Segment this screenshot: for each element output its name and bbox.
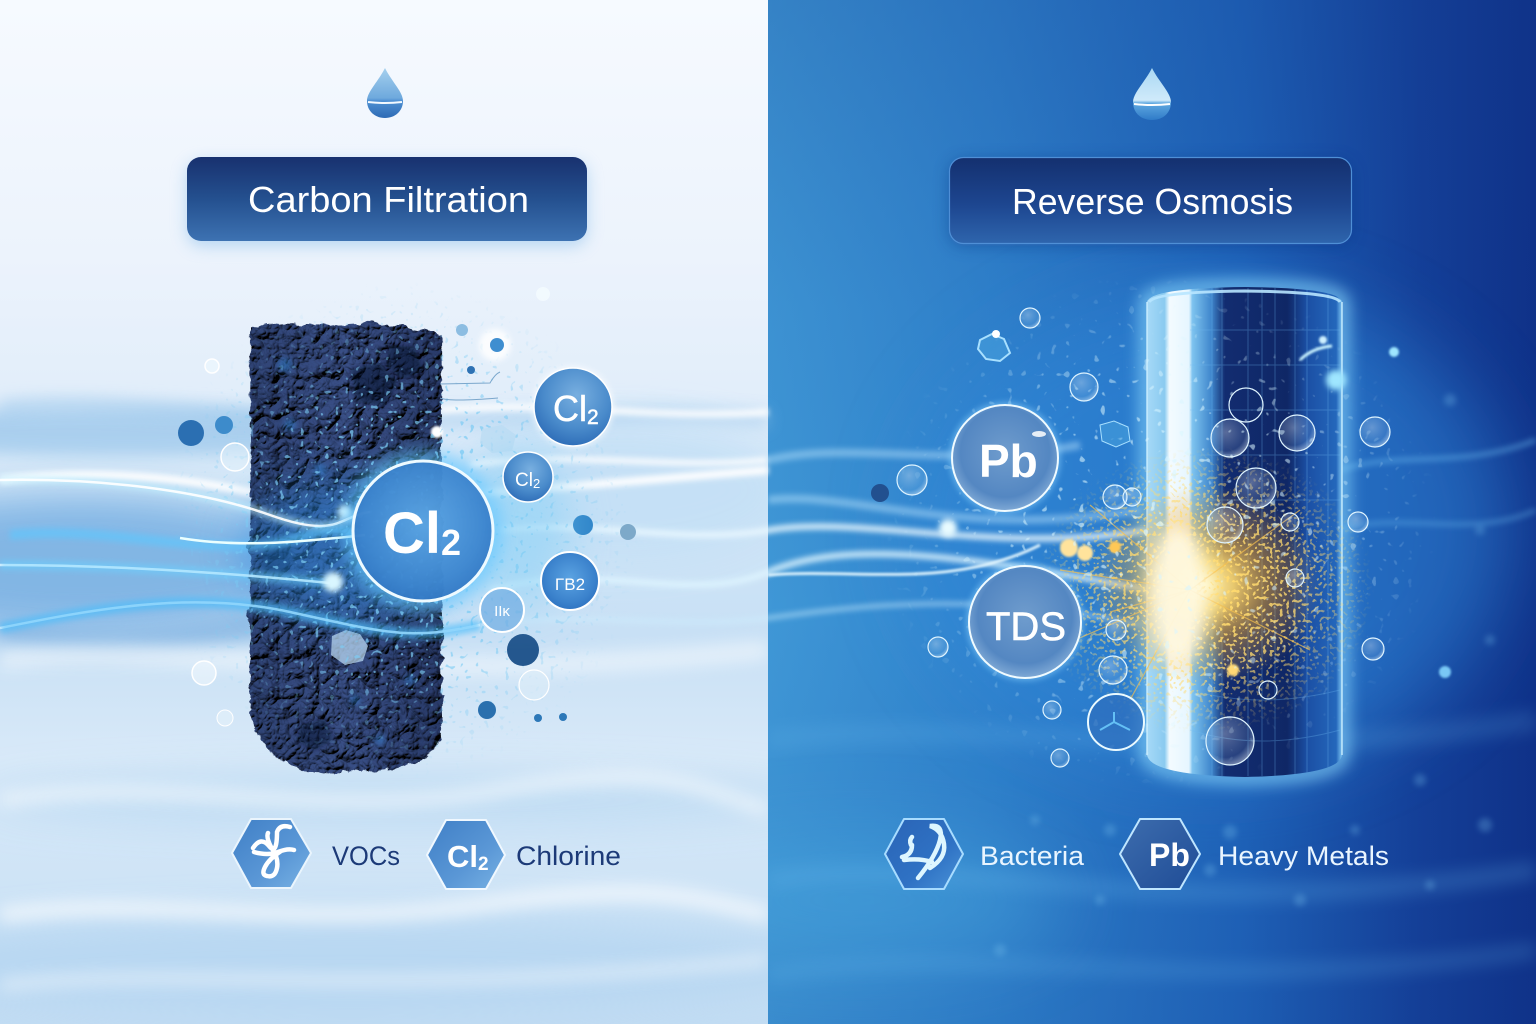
icon: lead hexagon: Pb: [1149, 837, 1190, 873]
bubble: garbled label right: [541, 552, 599, 610]
bubble: Pb: Pb: [979, 435, 1038, 487]
glass reverse osmosis membrane cylinder: [1147, 287, 1342, 777]
icon: bacteria hexagon: [885, 819, 963, 889]
heading: reverse osmosis: [949, 158, 1352, 246]
bubble: Cl2 upper: Cl: [553, 388, 587, 429]
heading: reverse osmosis: Reverse Osmosis: [1012, 181, 1293, 222]
bubble: Pb: [949, 402, 1061, 514]
bubble: garbled label lower: IIĸ: [494, 603, 510, 620]
icon: VOCs hexagon: [232, 819, 311, 888]
bubble: Cl2 upper: [532, 366, 614, 448]
legend: VOCs: [232, 819, 400, 888]
label: heavy metals: Heavy Metals: [1218, 841, 1389, 871]
heading: carbon filtration: Carbon Filtration: [248, 179, 529, 220]
label: VOCs: VOCs: [332, 841, 400, 871]
bright flow lines through carbon: [0, 480, 480, 633]
bubble: Cl2 small: [503, 452, 553, 502]
bubble: TDS: [966, 563, 1084, 681]
activated carbon block: [240, 321, 450, 771]
panel: carbon filtration background: [0, 0, 830, 1024]
membrane grid lines: [1190, 288, 1340, 776]
chlorine particles and bubbles around carbon block: [170, 280, 650, 780]
bubble: Cl2 upper: 2: [587, 406, 599, 429]
legend: bacteria: [885, 819, 1085, 889]
bubble: Cl2 large: [343, 451, 503, 611]
bubble: Cl2 large: 2: [441, 522, 461, 563]
label: bacteria: Bacteria: [980, 841, 1085, 871]
icon: chlorine hexagon: 2: [478, 854, 489, 875]
bubble: glowing organism: [1088, 694, 1144, 750]
water flow streaks behind filters: [0, 405, 1536, 625]
bubble: TDS: TDS: [986, 605, 1066, 649]
legend: heavy metals: [1120, 819, 1389, 889]
icon: chlorine hexagon: [427, 820, 505, 889]
bubble: Cl2 large: Cl: [383, 501, 441, 566]
heading: carbon filtration: [187, 157, 587, 246]
icon: water drop right: [1133, 68, 1171, 120]
bubble: Cl2 small: 2: [533, 476, 540, 491]
carbon granule shadows: [262, 345, 424, 751]
golden filtration burst: [1043, 450, 1371, 730]
bubble: garbled label right: ΓΒ2: [555, 575, 585, 594]
legend: chlorine: [427, 820, 621, 889]
icon: water drop left: [367, 68, 403, 118]
panel: reverse osmosis background: [768, 0, 1536, 1024]
icon: chlorine hexagon: Cl: [447, 839, 478, 874]
icon: lead hexagon: [1120, 819, 1200, 889]
label: chlorine: Chlorine: [516, 841, 621, 871]
bubble: Cl2 small: Cl: [515, 470, 533, 491]
contaminant bubbles around and inside membrane: [871, 280, 1451, 800]
bubble: garbled label lower: [480, 588, 524, 632]
